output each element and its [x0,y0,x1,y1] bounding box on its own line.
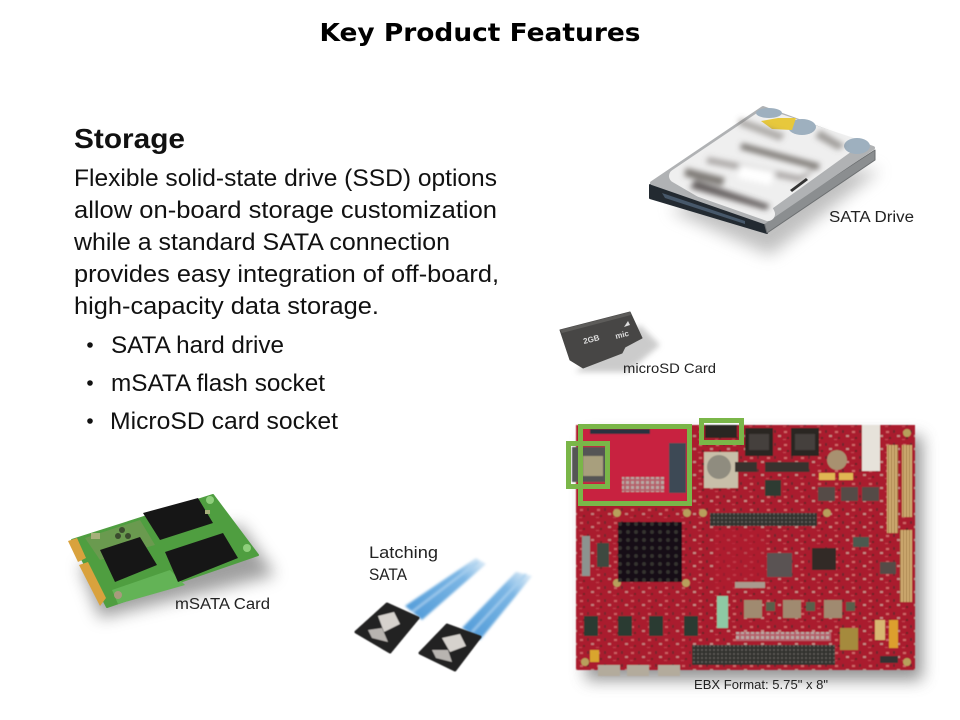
heat sink [618,522,682,582]
gold module [840,628,858,650]
label: Latching SATA: SATA [369,565,408,584]
paragraph: storage description [73,165,499,320]
board shadow [586,436,922,680]
gold edge connector [68,538,86,562]
paragraph: storage description: while a standard SATA connection [73,229,450,256]
image: microSD card [560,312,660,372]
battery [704,452,738,488]
center chips [767,553,792,577]
SATA socket [705,425,737,438]
memory chips [584,616,598,636]
connector left [356,604,418,652]
mounting holes [581,429,911,666]
image: latching SATA cables [356,558,532,670]
label: mSATA Card: mSATA Card [175,596,270,613]
ethernet jacks [745,428,773,456]
label: EBX format: EBX Format: 5.75" x 8" [694,678,828,692]
highlight: microSD socket [568,444,608,486]
image: SATA hard drive [650,108,880,255]
highlight: mSATA socket [580,426,690,504]
paragraph: storage description: high-capacity data storage. [74,293,379,320]
memory chips [100,537,157,582]
mSATA socket [669,443,686,493]
image: mSATA card [68,495,275,618]
label: Latching SATA: Latching [369,543,438,562]
image: EBX circuit board [568,420,922,680]
side connector [582,536,590,576]
capacitors [744,600,762,618]
paragraph: storage description: allow on-board storage customization [74,197,497,224]
PC/104 connectors [887,445,898,533]
highlight: SATA connector [702,420,742,442]
blurred label [684,118,845,210]
bottom connectors [736,632,831,641]
black header [710,513,817,526]
ICs [735,462,757,472]
drive corner pads [756,108,782,118]
label: Latching SATA [369,543,438,584]
label: SATA Drive: SATA Drive [829,209,914,226]
bullet list [87,332,338,435]
image: microSD card: 2GB [582,333,601,346]
paragraph: storage description: Flexible solid-state drive (SSD) options [74,165,497,192]
microSD socket [572,447,607,482]
paragraph: storage description: provides easy integration of off-board, [74,261,499,288]
label: microSD Card: microSD Card [623,360,716,376]
usb ports [598,665,620,676]
text block: storage [73,123,499,435]
power connector [862,425,880,471]
board [576,425,915,670]
connector right [420,625,480,670]
heading: storage: Storage [74,123,185,154]
title: Key Product Features [320,18,640,47]
bullet list: MicroSD card socket [110,408,338,435]
green label [717,596,728,628]
image: microSD card: mic [614,329,630,341]
bullet list: mSATA flash socket [111,370,325,397]
bullet list: SATA hard drive [111,332,284,359]
